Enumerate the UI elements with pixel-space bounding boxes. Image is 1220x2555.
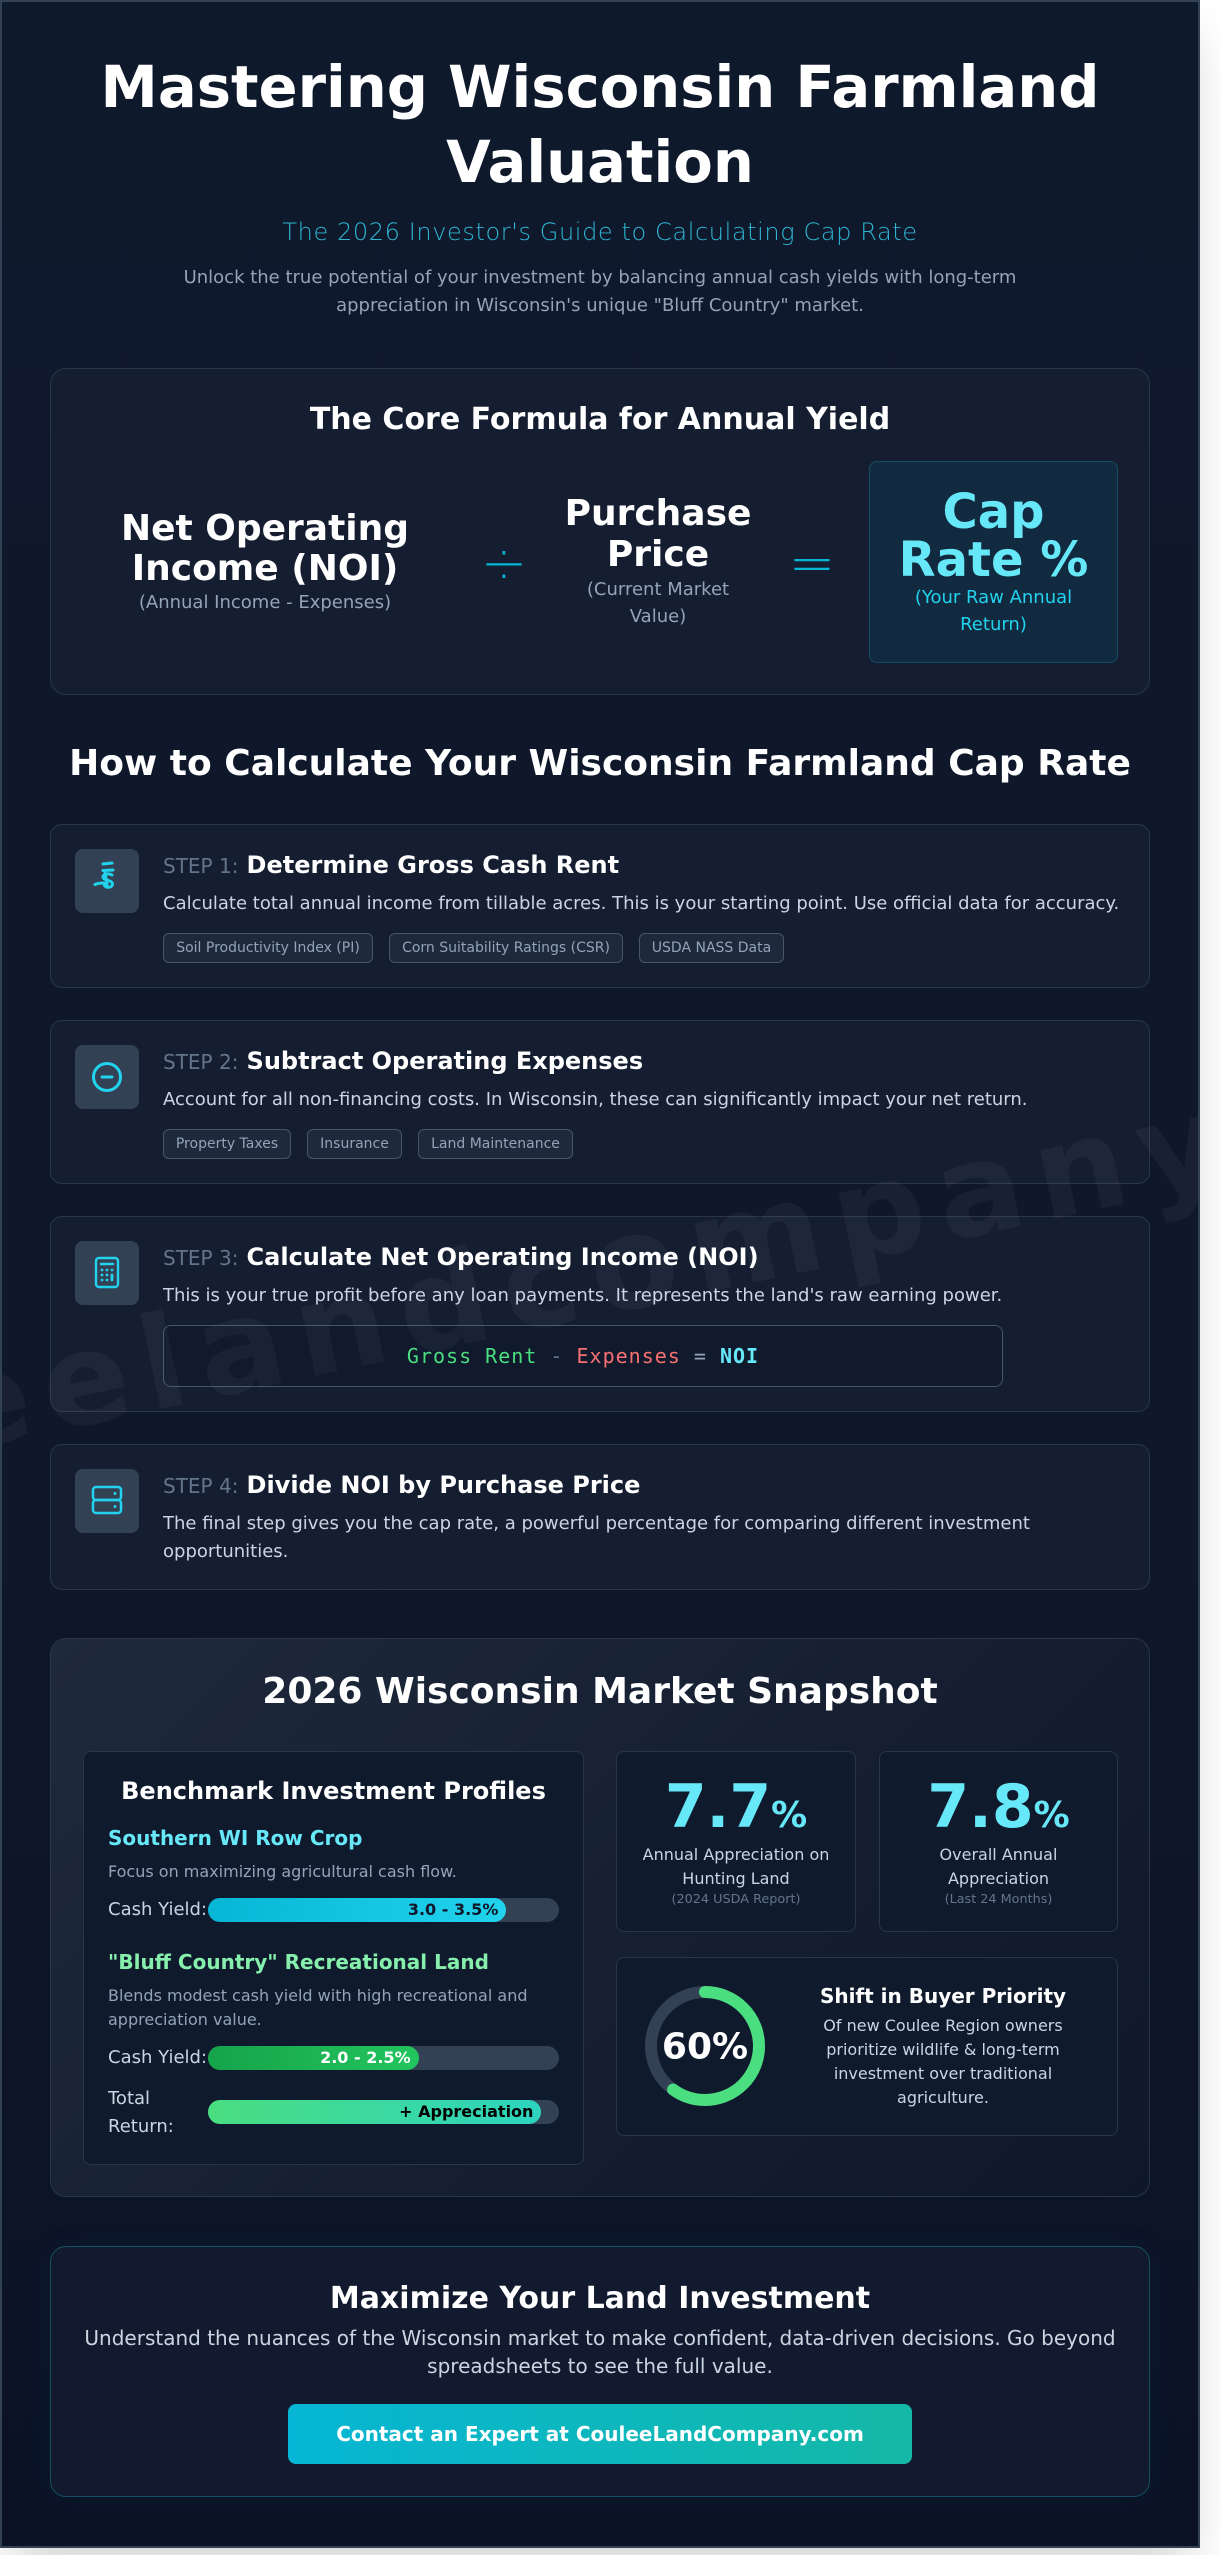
cap rate note: (Your Raw Annual: [915, 587, 1072, 608]
panel: core formula: [50, 368, 1150, 695]
result box: cap rate: [869, 461, 1118, 663]
tag: Corn Suitability Ratings (CSR): [402, 940, 610, 956]
cta text: [84, 2326, 1116, 2378]
tag: [163, 933, 373, 963]
profile text: Focus on maximizing agricultural cash flow.: [108, 1862, 457, 1881]
buyer heading: Shift in Buyer Priority: [820, 1984, 1066, 2008]
panel: step 2: [50, 1020, 1150, 1184]
step 2 text: Account for all non-financing costs. In Wisconsin, these can significantly impact your net return.: [163, 1089, 1028, 1110]
panel: step 3: [50, 1216, 1150, 1412]
cta button: [288, 2404, 912, 2464]
profile text: [108, 1986, 528, 2029]
stat caption: [940, 1845, 1057, 1888]
cap rate note: Return): [960, 614, 1027, 635]
icon: server: [75, 1469, 139, 1533]
bar: row crop yield: [208, 1898, 559, 1922]
bar: bluff yield: 2.0 - 2.5%: [320, 2048, 411, 2067]
step 4 text: opportunities.: [163, 1541, 288, 1562]
profile text: Blends modest cash yield with high recreational and: [108, 1986, 528, 2005]
title: Valuation: [446, 129, 754, 196]
bar: total return: [208, 2100, 559, 2124]
panel: step 4: [50, 1444, 1150, 1590]
formula term: purchase price: [565, 493, 751, 627]
tag: [639, 933, 784, 963]
step 2 heading: STEP 2: Subtract Operating Expenses: [163, 1047, 643, 1075]
bar: row crop yield: 3.0 - 3.5%: [408, 1900, 498, 1919]
cta button: Contact an Expert at CouleeLandCompany.com: [336, 2422, 864, 2446]
stat caption: Annual Appreciation on: [643, 1845, 829, 1864]
subtitle: The 2026 Investor's Guide to Calculating Cap Rate: [282, 218, 918, 246]
row label: Total: [108, 2088, 150, 2109]
cta heading: Maximize Your Land Investment: [330, 2281, 870, 2316]
formula term: purchase price: Purchase: [565, 493, 751, 534]
noi equation: Gross Rent - Expenses = NOI: [407, 1344, 759, 1368]
stat source: (2024 USDA Report): [672, 1892, 800, 1907]
intro text: [184, 267, 1016, 316]
steps heading: How to Calculate Your Wisconsin Farmland Cap Rate: [69, 743, 1131, 784]
icon: dollar: [75, 849, 139, 913]
panel: benchmark profiles: [83, 1751, 584, 2165]
donut chart: 60 percent: [645, 1986, 765, 2106]
formula term: purchase price: (Current Market: [587, 579, 729, 600]
step 3 heading: STEP 3: Calculate Net Operating Income (NOI): [163, 1243, 759, 1271]
cta text: Understand the nuances of the Wisconsin market to make confident, data-driven decisions. Go beyond: [84, 2326, 1116, 2350]
tag: Land Maintenance: [431, 1136, 560, 1152]
formula term: net operating income: Income (NOI): [132, 548, 398, 589]
buyer text: Of new Coulee Region owners: [823, 2016, 1063, 2035]
icon: minus circle: [75, 1045, 139, 1109]
donut chart: 60 percent: 60%: [662, 2026, 748, 2068]
stat source: (Last 24 Months): [945, 1892, 1052, 1907]
stat caption: [642, 1845, 829, 1888]
stat value: 7.8%: [927, 1772, 1070, 1842]
noi equation: [163, 1325, 1003, 1387]
step 4 heading: STEP 4: Divide NOI by Purchase Price: [163, 1471, 640, 1499]
profile title: bluff country: "Bluff Country" Recreational Land: [108, 1950, 489, 1974]
tag: Property Taxes: [176, 1136, 278, 1152]
formula term: purchase price: Value): [630, 606, 686, 627]
step 1 text: Calculate total annual income from tillable acres. This is your starting point. Use official data for accuracy.: [163, 893, 1119, 914]
row label: Return:: [108, 2116, 174, 2137]
profile text: appreciation value.: [108, 2010, 262, 2029]
row label: Cash Yield:: [108, 2047, 207, 2068]
stat caption: Hunting Land: [682, 1869, 790, 1888]
bar: total return: + Appreciation: [399, 2102, 533, 2121]
divide symbol: ÷: [481, 531, 527, 596]
row label: Cash Yield:: [108, 1899, 207, 1920]
step 4 text: The final step gives you the cap rate, a powerful percentage for comparing different investment: [163, 1513, 1030, 1534]
tag: [307, 1129, 402, 1159]
bar: bluff yield: [208, 2046, 559, 2070]
cap rate value: Cap: [942, 484, 1044, 540]
panel: call to action: [50, 2246, 1150, 2497]
step 1 heading: STEP 1: Determine Gross Cash Rent: [163, 851, 619, 879]
step 3 text: This is your true profit before any loan payments. It represents the land's raw earning power.: [163, 1285, 1002, 1306]
formula heading: The Core Formula for Annual Yield: [310, 402, 890, 437]
panel: buyer priority: [616, 1957, 1118, 2136]
tag: Insurance: [320, 1136, 389, 1152]
cap rate value: Rate %: [899, 532, 1088, 588]
formula term: net operating income: [121, 508, 409, 613]
cap rate value: [899, 484, 1088, 588]
formula term: net operating income: Net Operating: [121, 508, 409, 549]
snapshot heading: 2026 Wisconsin Market Snapshot: [262, 1671, 938, 1712]
formula term: net operating income: (Annual Income - Expenses): [139, 592, 391, 613]
profile title: row crop: Southern WI Row Crop: [108, 1826, 362, 1850]
equals symbol: =: [789, 531, 835, 596]
tag: Soil Productivity Index (PI): [176, 940, 360, 956]
title: [101, 54, 1099, 196]
intro text: Unlock the true potential of your investment by balancing annual cash yields with long-term: [184, 267, 1016, 288]
cap rate note: [915, 587, 1072, 635]
tag: [418, 1129, 573, 1159]
stat: hunting land appreciation: [616, 1751, 856, 1932]
buyer text: prioritize wildlife & long-term: [826, 2040, 1060, 2059]
title: Mastering Wisconsin Farmland: [101, 54, 1099, 121]
panel: step 1: [50, 824, 1150, 988]
row label: [108, 2088, 174, 2137]
benchmark heading: Benchmark Investment Profiles: [121, 1777, 546, 1805]
tag: [389, 933, 623, 963]
step 4 text: [162, 1513, 1030, 1562]
intro text: appreciation in Wisconsin's unique "Bluff Country" market.: [336, 295, 864, 316]
icon: calculator: [75, 1241, 139, 1305]
stat: overall appreciation: [879, 1751, 1118, 1932]
stat value: 7.7%: [665, 1772, 807, 1842]
panel: market snapshot: [50, 1638, 1150, 2197]
buyer text: agriculture.: [897, 2088, 989, 2107]
tag: USDA NASS Data: [652, 940, 771, 956]
stat caption: Overall Annual: [940, 1845, 1057, 1864]
formula term: purchase price: Price: [607, 534, 709, 575]
buyer text: investment over traditional: [834, 2064, 1052, 2083]
buyer text: [823, 2016, 1063, 2107]
tag: [163, 1129, 291, 1159]
cta text: spreadsheets to see the full value.: [427, 2354, 773, 2378]
stat caption: Appreciation: [948, 1869, 1049, 1888]
